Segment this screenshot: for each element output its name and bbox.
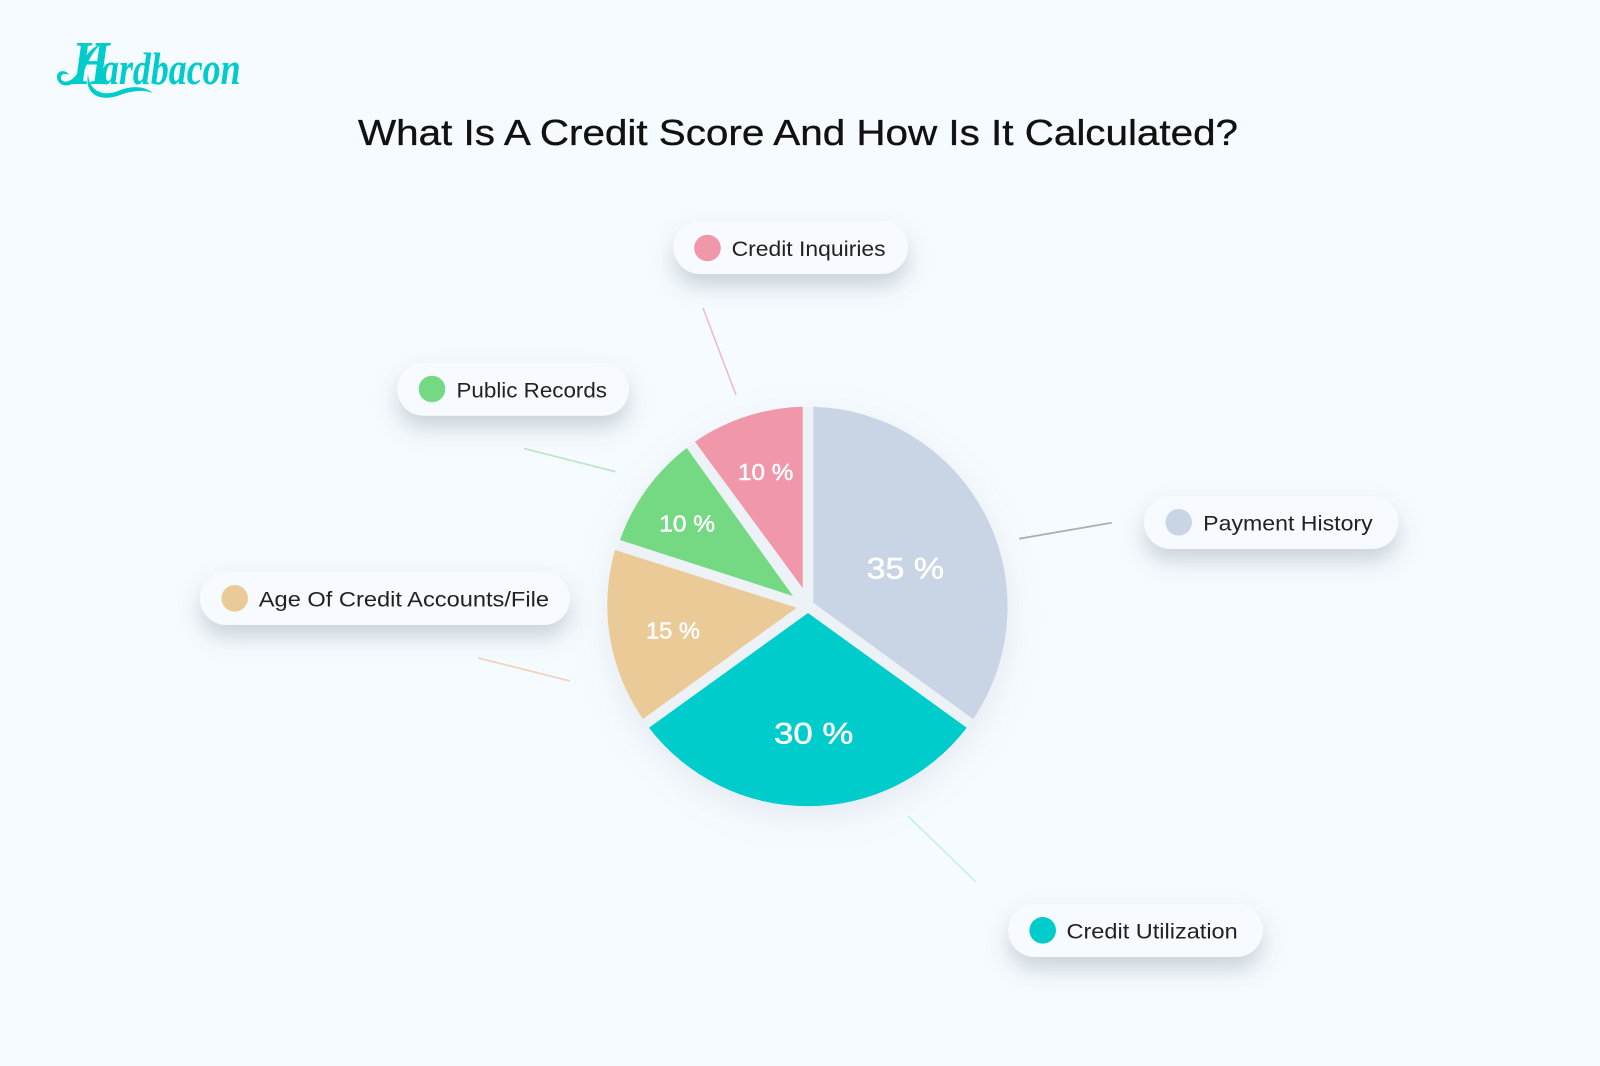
value: 10% pink: 10 %	[738, 459, 793, 485]
leader line: public records	[524, 448, 616, 472]
slice: public records 10%	[620, 448, 793, 596]
legend pill: credit inquiries	[674, 221, 908, 274]
legend pill: public records	[397, 363, 629, 416]
legend pill: credit utilization: Credit Utilization	[1066, 920, 1238, 943]
value: 15%: 15 %	[646, 617, 700, 643]
leader line: payment history	[1019, 523, 1112, 539]
pie base	[608, 407, 1008, 806]
slice: payment history 35%	[813, 407, 1008, 719]
leader line: age of credit accounts	[478, 658, 570, 681]
value: 35%: 35 %	[867, 552, 944, 585]
slice: credit utilization 30%	[649, 613, 967, 806]
value: 10% green: 10 %	[659, 511, 715, 537]
leader line: credit inquiries	[703, 308, 736, 395]
pie chart	[607, 407, 1008, 806]
leader line: credit utilization	[908, 816, 976, 882]
legend pill: credit utilization	[1008, 904, 1263, 957]
legend pill: age of credit accounts: Age Of Credit Accounts/File	[259, 589, 549, 612]
logo: Hardbacon: Hardbacon	[71, 29, 241, 98]
slice: age of credit 15%	[607, 550, 797, 719]
value: 30%: 30 %	[774, 717, 853, 750]
slice: credit inquiries 10%	[695, 407, 803, 588]
legend pill: payment history: Payment History	[1203, 513, 1373, 536]
legend pill: age of credit accounts	[200, 572, 570, 625]
legend pill: payment history	[1144, 496, 1398, 549]
legend pill: credit inquiries: Credit Inquiries	[732, 238, 886, 261]
title: What Is A Credit Score And How Is It Calculated?	[358, 112, 1238, 153]
legend pill: public records: Public Records	[456, 380, 607, 402]
